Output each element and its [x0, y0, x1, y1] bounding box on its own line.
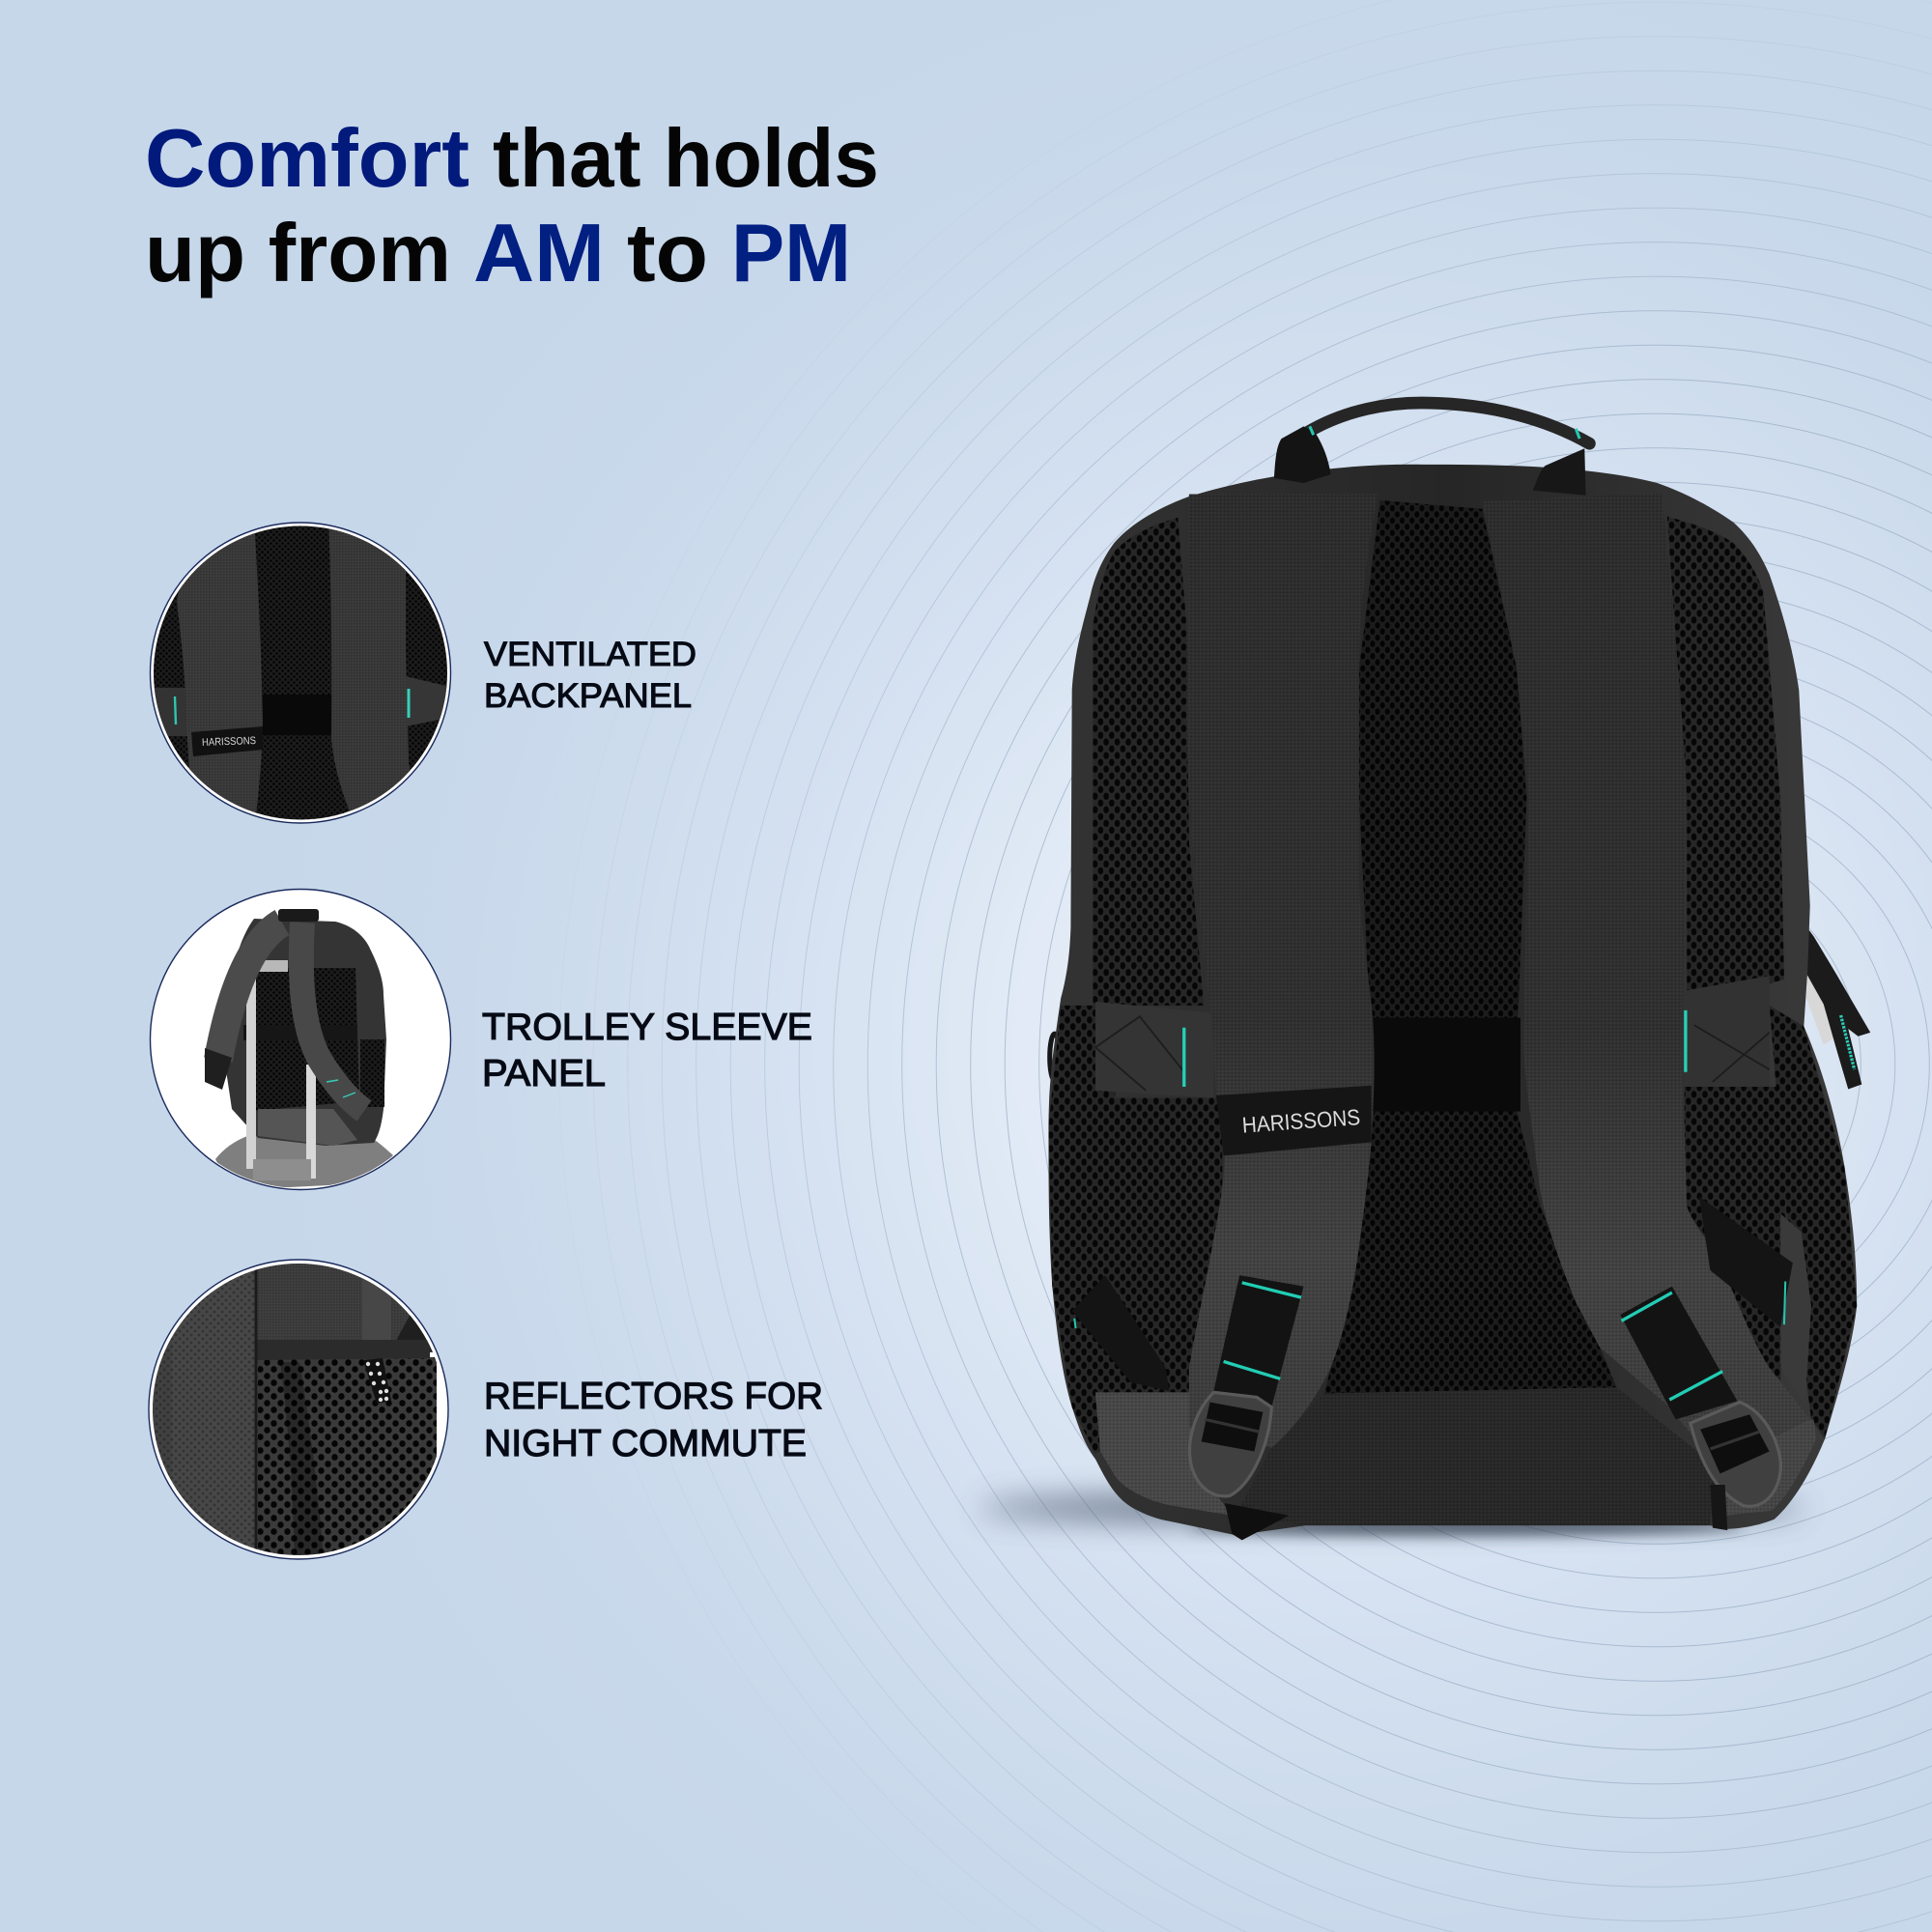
right shoulder strap [1482, 493, 1810, 1466]
left buckle loop [1190, 1392, 1271, 1496]
brand tag: HARISSONS [1216, 1086, 1372, 1155]
suitcase [215, 1136, 393, 1188]
side webbing straps [1072, 1197, 1793, 1391]
backpack ground shadow [980, 1492, 1805, 1535]
title: to [627, 208, 708, 299]
right buckle loop [1690, 1403, 1780, 1506]
panel: trolley sleeve detail circle [151, 889, 450, 1190]
panel: reflectors detail circle [145, 1256, 450, 1565]
lower padding [1095, 1213, 1816, 1525]
backpack body [1048, 465, 1857, 1535]
label: reflectors for night commute [484, 1376, 823, 1464]
panel: ventilated backpanel detail circle [145, 517, 454, 826]
title: PM [731, 208, 851, 299]
label: trolley sleeve panel: TROLLEY SLEEVE [482, 1007, 812, 1048]
right adjuster webbing with teal stitches [1620, 1287, 1737, 1419]
title: Comfort [145, 113, 469, 205]
brand tag: HARISSONS: HARISSONS [1241, 1104, 1361, 1138]
icon: top carry handle [1274, 403, 1589, 496]
label: trolley sleeve panel: PANEL [482, 1053, 606, 1094]
label: ventilated backpanel: VENTILATED [484, 636, 696, 673]
left adjuster webbing with teal stitches [1213, 1275, 1303, 1407]
left shoulder strap [1186, 494, 1378, 1448]
title: AM [473, 208, 605, 299]
main backpack illustration [1048, 403, 1870, 1540]
label: trolley sleeve panel [482, 1007, 812, 1094]
bottom webbing tab [1225, 1503, 1289, 1540]
icon: right zipper pulls [1806, 926, 1870, 1090]
brand tag [191, 726, 263, 756]
label: ventilated backpanel [484, 636, 696, 715]
ventilated back mesh panels [1093, 500, 1784, 1394]
trolley handle [246, 960, 316, 1180]
label: reflectors for night commute: REFLECTORS FOR [484, 1376, 823, 1417]
icon: left zipper loop [1050, 1034, 1060, 1081]
background with concentric rings [632, 37, 1932, 1932]
side mesh pockets [1048, 1006, 1857, 1454]
label: ventilated backpanel: BACKPANEL [484, 677, 692, 715]
small backpack [222, 919, 386, 1146]
title: that holds [493, 113, 879, 205]
reflector strip with dots [363, 1358, 391, 1404]
title: up from [145, 208, 451, 299]
label: reflectors for night commute: NIGHT COMMUTE [484, 1423, 807, 1464]
brand tag: HARISSONS [202, 735, 256, 749]
side panels with teal stitching [1095, 976, 1770, 1097]
title [145, 113, 879, 299]
